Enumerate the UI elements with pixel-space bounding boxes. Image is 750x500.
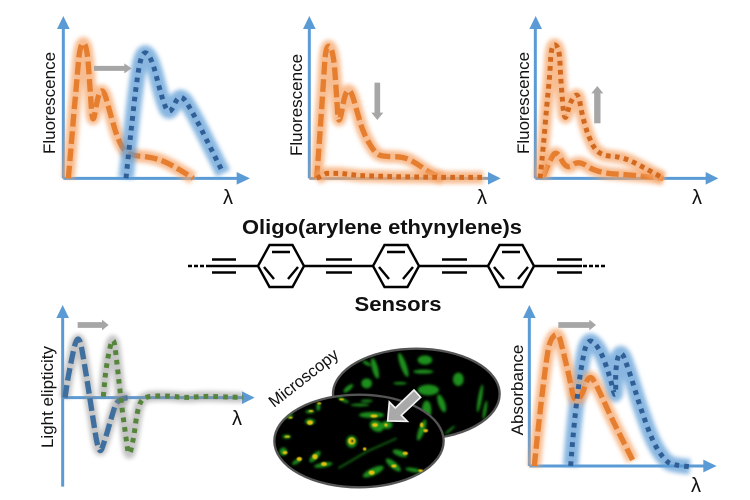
chart axes: [57, 16, 250, 185]
curve: blue dotted glow: [571, 341, 690, 467]
micrograph: front ellipse, green and yellow: [274, 395, 444, 487]
y-axis label: Fluorescence: Fluorescence: [514, 52, 533, 154]
arrow: up: [591, 86, 603, 123]
chart axes: [56, 305, 255, 487]
chain dashes and triple bonds: [188, 260, 605, 272]
x-axis label: lambda: λ: [691, 475, 701, 497]
panel: fluorescence quenching: [303, 16, 501, 185]
curve: green dotted: [103, 340, 243, 453]
subtitle: Sensors: [354, 294, 442, 316]
y-axis label: Light elipticity: Light elipticity: [38, 345, 57, 448]
x-axis label: lambda: λ: [232, 408, 242, 430]
panel: circular dichroism: [56, 305, 255, 487]
x-axis label: lambda: λ: [477, 187, 487, 209]
benzene ring 3: [488, 245, 534, 287]
chart axes: [523, 305, 717, 472]
y-axis label: Fluorescence: Fluorescence: [287, 54, 306, 156]
title: Oligo(arylene ethynylene)s: [242, 216, 522, 239]
curve: orange dotted after quenching: [317, 173, 483, 178]
benzene ring 1: [258, 245, 304, 287]
panel: fluorescence red shift: [57, 16, 250, 185]
arrow: shift right: [78, 320, 109, 330]
y-axis label: Fluorescence: Fluorescence: [40, 52, 59, 154]
x-axis label: lambda: λ: [223, 187, 233, 209]
arrow: from back to front micrograph: [388, 390, 421, 421]
curve: orange dashed before quenching: [317, 46, 443, 178]
panel: fluorescence enhancement: [529, 16, 718, 185]
micrograph: back ellipse, green only: [333, 349, 500, 439]
curve: orange dashed before enhancement: [543, 153, 663, 178]
arrow: down: [371, 83, 383, 120]
chart axes: [303, 16, 501, 185]
curve: blue dotted: [571, 341, 690, 467]
panel: microscopy: [274, 349, 500, 487]
arrow: shift right: [558, 320, 596, 330]
chart axes: [529, 16, 718, 185]
curve: orange dashed emission: [68, 43, 193, 178]
arrow: shift right: [94, 63, 132, 73]
x-axis label: lambda: λ: [692, 187, 702, 209]
curve: orange dotted after enhancement: [540, 45, 663, 178]
molecule: oligo(arylene ethynylene) structure: [188, 245, 605, 287]
curve: blue dotted emission: [126, 53, 223, 178]
panel: absorbance shift: [523, 305, 717, 472]
curve: orange dashed: [534, 335, 633, 466]
benzene ring 2: [373, 245, 419, 287]
label: Microscopy: Microscopy: [265, 345, 343, 411]
curve: blue dashed: [65, 339, 130, 451]
y-axis label: Absorbance: Absorbance: [508, 345, 527, 435]
